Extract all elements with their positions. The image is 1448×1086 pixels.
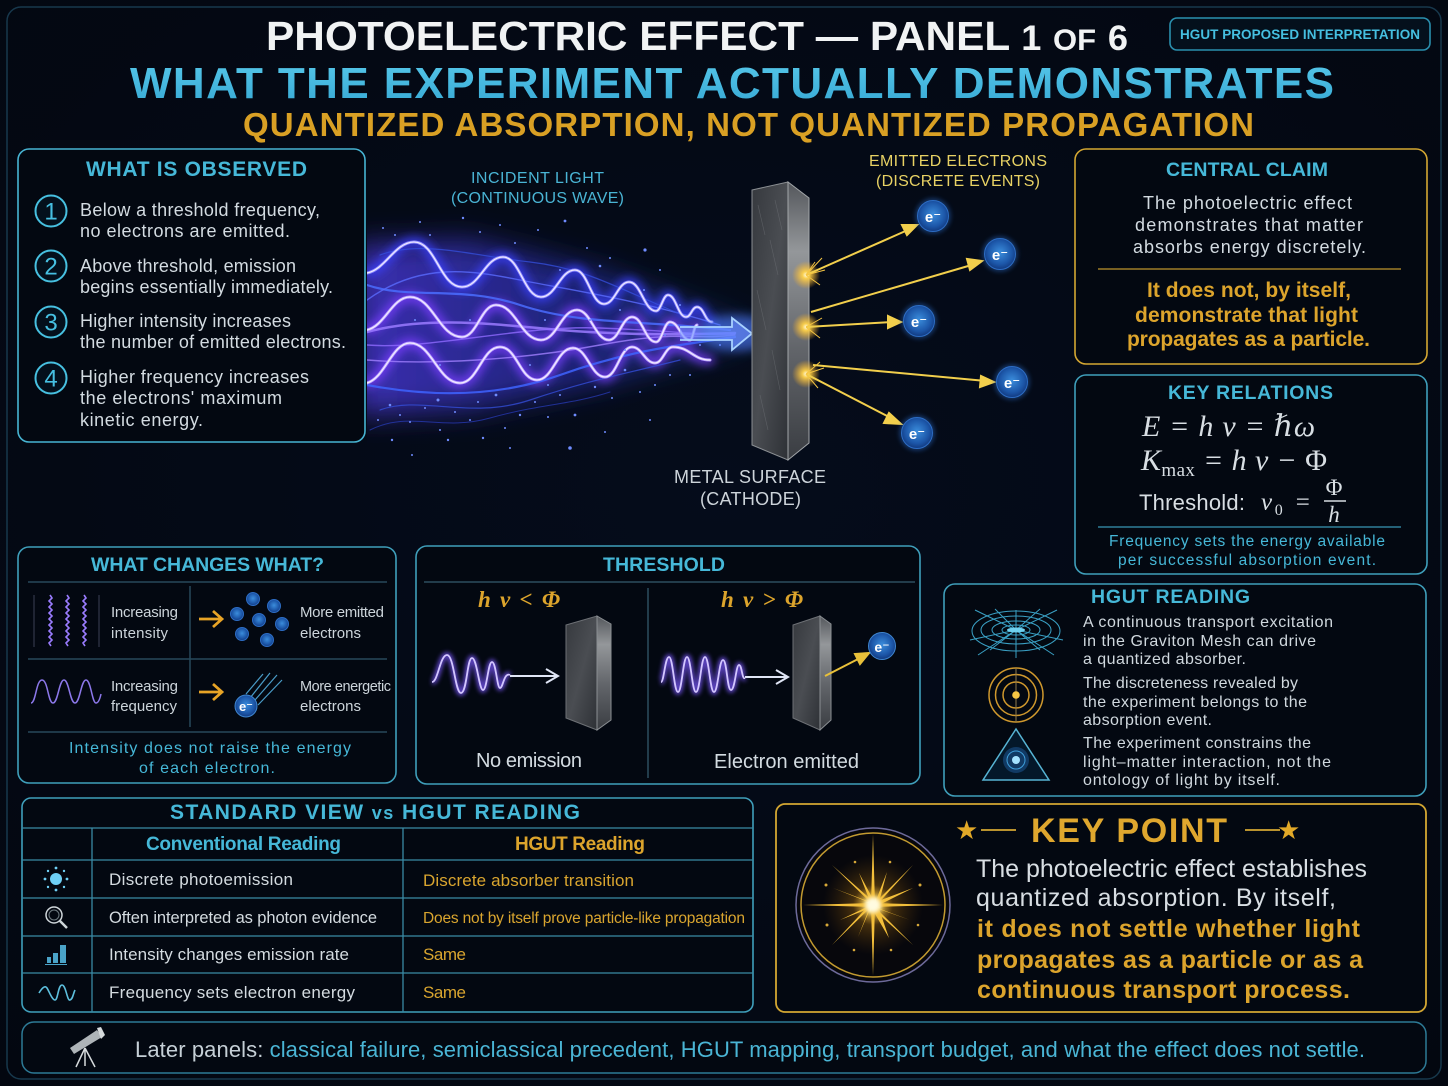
heading: key relations: KEY RELATIONS	[1168, 382, 1333, 404]
heading: what is observed: WHAT IS OBSERVED	[86, 158, 307, 181]
icon: starburst	[796, 828, 950, 982]
panel: what is observed	[18, 149, 365, 442]
above threshold wave, plate and electron: e⁻	[874, 639, 890, 655]
panel: what changes what	[18, 547, 396, 783]
claim emphasis: propagates as a particle.	[1127, 328, 1370, 351]
icon: telescope	[70, 1027, 105, 1067]
heading: key point	[955, 812, 1300, 850]
row 2: Does not by itself prove particle-like propagation	[423, 910, 745, 927]
row 2	[46, 907, 745, 928]
arrow: frequency	[199, 684, 222, 700]
note: intensity: of each electron.	[139, 760, 275, 777]
claim emphasis: demonstrate that light	[1135, 304, 1358, 327]
text: constraint	[1083, 735, 1331, 789]
metal surface plate	[752, 182, 809, 460]
column header: HGUT: HGUT Reading	[515, 834, 645, 855]
formula: threshold: Threshold:	[1139, 490, 1245, 515]
label: more energetic electrons: electrons	[300, 698, 361, 715]
label: increasing intensity: intensity	[111, 625, 168, 642]
item 1: no electrons are emitted.	[80, 221, 290, 241]
item 2: Above threshold, emission	[80, 256, 296, 276]
item 4: kinetic energy.	[80, 410, 203, 430]
label: more emitted electrons	[300, 604, 384, 642]
label: more energetic electrons	[300, 679, 391, 715]
row 2: Often interpreted as photon evidence	[109, 909, 377, 927]
label: emitted electrons: EMITTED ELECTRONS	[869, 153, 1047, 170]
text: discreteness	[1083, 675, 1307, 729]
text: constraint: ontology of light by itself.	[1083, 772, 1280, 789]
table: standard view vs HGUT reading	[22, 798, 753, 1012]
electron 4	[994, 364, 1030, 400]
electron 2	[982, 236, 1018, 272]
item 3: Higher intensity increases	[80, 311, 291, 331]
note: frequency: per successful absorption event.	[1118, 552, 1376, 569]
icon: energetic electron: e⁻	[239, 699, 253, 714]
formula: below threshold: h ν < Φ	[478, 587, 560, 612]
claim emphasis	[1127, 279, 1370, 351]
column header: conventional: Conventional Reading	[146, 834, 341, 855]
below threshold wave and plate	[432, 616, 611, 730]
label: metal surface	[674, 467, 826, 509]
icon: frequency wave	[31, 680, 101, 703]
formula: threshold	[1139, 475, 1346, 527]
item 2: begins essentially immediately.	[80, 277, 333, 297]
icon: triangle	[983, 729, 1049, 780]
icon: many electrons	[230, 592, 288, 646]
table heading: STANDARD VIEW vs HGUT READING	[170, 801, 580, 824]
badge: HGUT proposed interpretation	[1170, 18, 1430, 50]
footer text: Later panels: classical failure, semiclassical precedent, HGUT mapping, transport budget, and what the effect does not settle.	[135, 1037, 1365, 1062]
footer: later panels	[22, 1022, 1426, 1073]
claim text: demonstrates that matter	[1135, 215, 1363, 235]
label: emitted electrons: (DISCRETE EVENTS)	[876, 173, 1040, 190]
item 4: Higher frequency increases	[80, 367, 309, 387]
key point statement: propagates as a particle or as a	[977, 946, 1364, 974]
item 1	[36, 196, 320, 241]
label: increasing frequency: frequency	[111, 698, 178, 715]
tagline: QUANTIZED ABSORPTION, NOT QUANTIZED PROPAGATION	[243, 106, 1254, 143]
arrow: intensity	[199, 611, 222, 627]
note: frequency: Frequency sets the energy available	[1109, 533, 1385, 550]
text: discreteness: The discreteness revealed by	[1083, 675, 1298, 692]
formula: threshold: Φ	[1326, 475, 1343, 500]
label: metal surface: (CATHODE)	[700, 489, 801, 509]
text: transport excitation: in the Graviton Mesh can drive	[1083, 633, 1316, 650]
heading: key point: ★	[955, 815, 978, 845]
item 3: 3	[44, 310, 58, 336]
row 4	[39, 983, 466, 1002]
label: increasing frequency	[111, 678, 178, 715]
text: discreteness: absorption event.	[1083, 712, 1212, 729]
item 1: Below a threshold frequency,	[80, 200, 320, 220]
label: more emitted electrons: electrons	[300, 625, 361, 642]
formula: maximum kinetic energy: = h ν −	[1195, 444, 1305, 477]
diagram: incident light waves	[355, 217, 750, 456]
row 4: Same	[423, 983, 466, 1002]
item 4: the electrons' maximum	[80, 388, 282, 408]
label: emitted electrons	[869, 153, 1047, 190]
electron 3: e⁻	[911, 314, 927, 331]
row 3: Intensity changes emission rate	[109, 945, 349, 964]
electron 2: e⁻	[992, 247, 1008, 264]
text: transport excitation: A continuous transport excitation	[1083, 614, 1333, 631]
subtitle: WHAT THE EXPERIMENT ACTUALLY DEMONSTRATES	[130, 59, 1334, 108]
emission arrows and sparks	[792, 225, 994, 424]
panel: key relations	[1075, 375, 1427, 574]
text: constraint: light–matter interaction, not the	[1083, 754, 1331, 771]
item 4: 4	[44, 366, 58, 392]
label: increasing frequency: Increasing	[111, 678, 178, 695]
heading: key point: ★	[1277, 815, 1300, 845]
formula: threshold: =	[1285, 489, 1311, 516]
text: transport excitation	[1083, 614, 1333, 668]
heading: threshold: THRESHOLD	[603, 554, 725, 576]
arrow: incident beam	[680, 315, 776, 351]
item 3	[36, 306, 346, 352]
icon: graviton mesh	[970, 609, 1063, 658]
formula: threshold: 0	[1275, 502, 1283, 519]
text: transport excitation: a quantized absorber.	[1083, 651, 1246, 668]
key point statement: continuous transport process.	[977, 976, 1350, 1004]
claim text: absorbs energy discretely.	[1133, 237, 1366, 257]
item 3: the number of emitted electrons.	[80, 332, 346, 352]
panel: key point	[776, 804, 1426, 1012]
claim text: The photoelectric effect	[1143, 193, 1352, 213]
caption: electron emitted: Electron emitted	[714, 751, 859, 773]
row 3: Same	[423, 945, 466, 964]
formula: photon energy: E = h ν = ℏω	[1141, 410, 1315, 443]
heading: what changes what: WHAT CHANGES WHAT?	[91, 554, 324, 576]
item 1: 1	[44, 198, 58, 226]
item 2: 2	[44, 254, 58, 280]
row 1: Discrete photoemission	[109, 870, 293, 889]
formula: maximum kinetic energy: max	[1161, 460, 1195, 481]
label: more energetic electrons: More energetic	[300, 679, 391, 695]
item 2	[36, 250, 333, 297]
caption: no emission: No emission	[476, 750, 582, 772]
label: metal surface: METAL SURFACE	[674, 467, 826, 487]
label: increasing intensity: Increasing	[111, 604, 178, 621]
icon: target rings	[989, 668, 1043, 722]
heading: key point: KEY POINT	[1031, 812, 1227, 850]
electron 1: e⁻	[925, 209, 941, 226]
heading: HGUT reading: HGUT READING	[1091, 586, 1250, 608]
key point statement: quantized absorption. By itself,	[976, 884, 1336, 912]
formula: threshold: ν	[1261, 489, 1272, 516]
text: constraint: The experiment constrains the	[1083, 735, 1311, 752]
icon: energetic electron	[235, 673, 282, 717]
note: intensity	[69, 740, 351, 777]
row 3	[45, 945, 466, 965]
badge: HGUT proposed interpretation: HGUT PROPOSED INTERPRETATION	[1180, 27, 1420, 42]
key point statement: The photoelectric effect establishes	[976, 855, 1367, 883]
electron 5: e⁻	[909, 426, 925, 443]
label: incident light: (CONTINUOUS WAVE)	[451, 190, 624, 207]
label: more emitted electrons: More emitted	[300, 604, 384, 621]
text: discreteness: the experiment belongs to the	[1083, 694, 1307, 711]
formula: maximum kinetic energy: K	[1141, 444, 1161, 477]
label: incident light	[451, 170, 624, 207]
electron 1	[915, 198, 951, 234]
note: frequency	[1109, 533, 1385, 569]
title: PHOTOELECTRIC EFFECT — PANEL 1 OF 6	[266, 13, 1128, 59]
row 1	[44, 867, 634, 891]
formula: above threshold: h ν > Φ	[721, 587, 803, 612]
row 1: Discrete absorber transition	[423, 871, 634, 890]
formula: threshold: h	[1328, 502, 1340, 527]
panel: threshold	[416, 546, 920, 784]
note: intensity: Intensity does not raise the energy	[69, 740, 351, 757]
claim text	[1133, 193, 1366, 257]
panel: HGUT reading	[944, 584, 1426, 796]
row 4: Frequency sets electron energy	[109, 983, 356, 1002]
key point statement	[976, 855, 1367, 1004]
electron 4: e⁻	[1004, 375, 1020, 392]
electron 3	[901, 303, 937, 339]
label: increasing intensity	[111, 604, 178, 642]
claim emphasis: It does not, by itself,	[1147, 279, 1351, 302]
panel: central claim	[1075, 149, 1427, 364]
electron 5	[899, 415, 935, 451]
key point statement: it does not settle whether light	[977, 915, 1361, 943]
item 4	[36, 362, 309, 430]
label: incident light: INCIDENT LIGHT	[471, 170, 604, 187]
formula: maximum kinetic energy: Φ	[1305, 444, 1327, 477]
icon: intensity waves	[34, 595, 99, 647]
above threshold wave, plate and electron	[661, 616, 896, 730]
heading: central claim: CENTRAL CLAIM	[1166, 159, 1328, 181]
